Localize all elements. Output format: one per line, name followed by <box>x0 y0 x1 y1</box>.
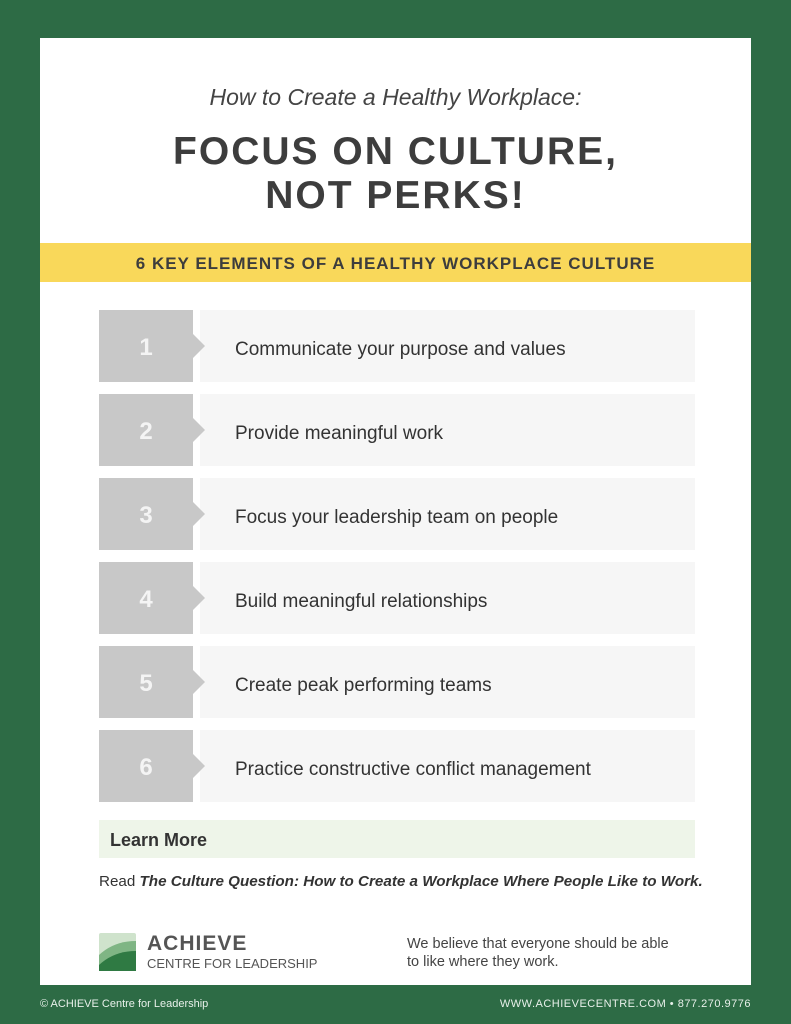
logo: ACHIEVE <box>147 932 247 955</box>
item 4 <box>99 562 695 634</box>
tagline: to like where they work. <box>407 954 559 970</box>
list of elements: 1 <box>139 334 153 361</box>
list of elements: Create peak performing teams <box>235 674 492 696</box>
logo: CENTRE FOR LEADERSHIP <box>147 956 317 971</box>
item 3 <box>99 478 695 550</box>
list of elements: 6 <box>139 754 153 781</box>
item 1 <box>99 310 695 382</box>
logo <box>99 932 317 971</box>
list of elements <box>99 310 695 802</box>
footer left: © ACHIEVE Centre for Leadership <box>40 998 208 1010</box>
title: NOT PERKS! <box>265 174 526 217</box>
subtitle: How to Create a Healthy Workplace: <box>210 84 582 110</box>
list of elements: 4 <box>139 586 153 613</box>
list of elements: Build meaningful relationships <box>235 590 487 612</box>
icon: logo mark <box>99 933 136 971</box>
title: FOCUS ON CULTURE, <box>173 130 618 173</box>
tagline: We believe that everyone should be able <box>407 936 669 952</box>
list of elements: Focus your leadership team on people <box>235 506 558 528</box>
item 5 <box>99 646 695 718</box>
yellow banner <box>40 243 751 282</box>
list of elements: Provide meaningful work <box>235 422 443 444</box>
learn more box <box>99 820 695 858</box>
yellow banner: 6 KEY ELEMENTS OF A HEALTHY WORKPLACE CULTURE <box>136 254 655 273</box>
reading recommendation: Read The Culture Question: How to Create a Workplace Where People Like to Work. <box>99 873 703 890</box>
list of elements: Communicate your purpose and values <box>235 338 566 360</box>
footer right: WWW.ACHIEVECENTRE.COM • 877.270.9776 <box>500 998 751 1010</box>
title <box>173 130 618 217</box>
tagline <box>407 936 669 970</box>
list of elements: 3 <box>139 502 153 529</box>
item 6 <box>99 730 695 802</box>
list of elements: 2 <box>139 418 153 445</box>
learn more box: Learn More <box>110 830 207 850</box>
list of elements: 5 <box>139 670 153 697</box>
list of elements: Practice constructive conflict management <box>235 758 591 780</box>
item 2 <box>99 394 695 466</box>
